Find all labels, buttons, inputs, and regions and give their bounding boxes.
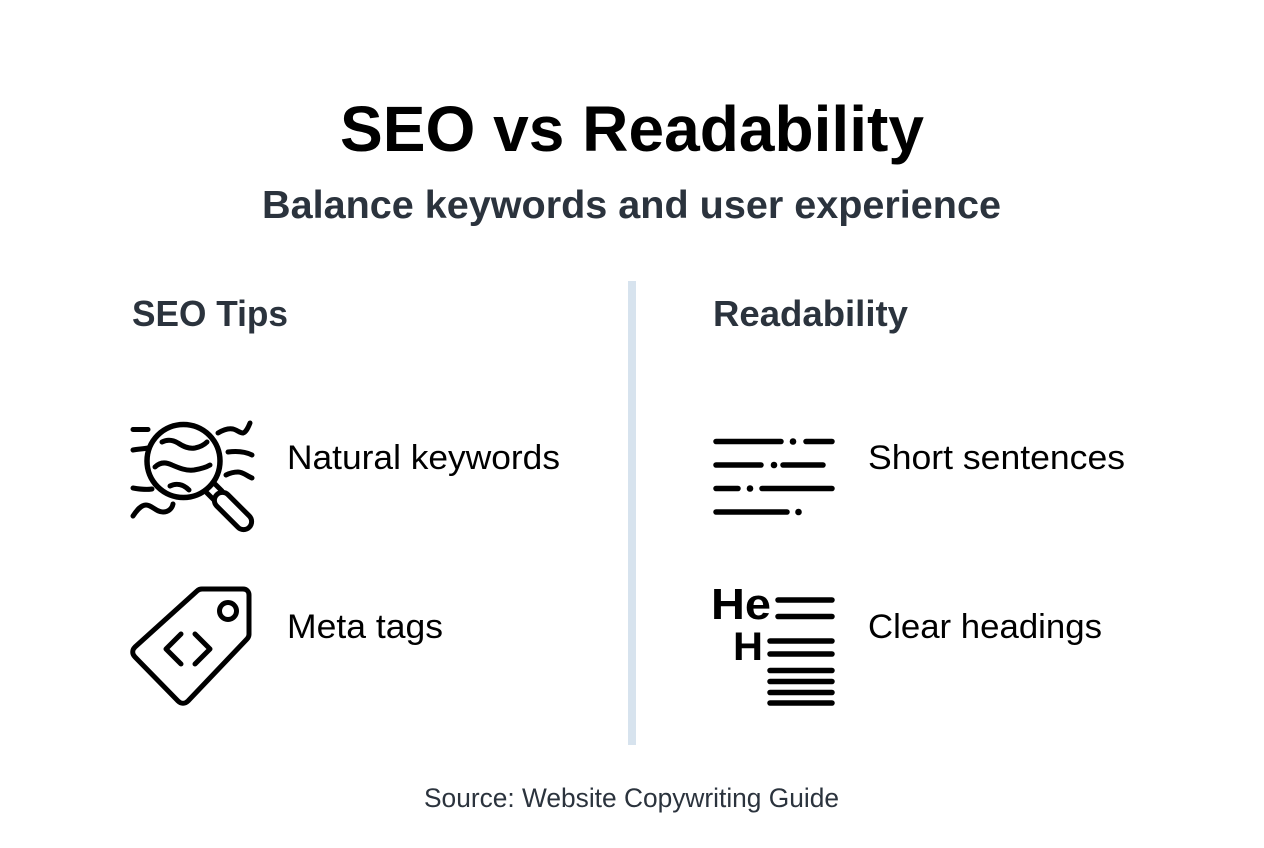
- label: Clear headings: Clear headings: [868, 608, 1102, 646]
- icon: headings with text lines: [711, 580, 832, 703]
- icon: short text lines: [716, 438, 832, 515]
- heading: SEO Tips: SEO Tips: [132, 293, 288, 334]
- panel: SEO tips: [132, 293, 560, 703]
- source note: Source: Website Copywriting Guide: [424, 783, 839, 813]
- label: Short sentences: Short sentences: [868, 439, 1125, 477]
- label: Natural keywords: Natural keywords: [287, 439, 560, 477]
- panel: Readability: [711, 293, 1125, 703]
- label: Meta tags: Meta tags: [287, 608, 443, 646]
- icon: magnifying glass over wavy text: [133, 423, 255, 533]
- icon: headings with text lines: He: [711, 580, 771, 629]
- icon: price tag with code brackets: [133, 589, 249, 703]
- icon: headings with text lines: H: [733, 625, 763, 669]
- center divider: [628, 281, 636, 745]
- subtitle: Balance keywords and user experience: [262, 184, 1001, 227]
- title: SEO vs Readability: [340, 93, 924, 165]
- heading: Readability: Readability: [713, 293, 908, 334]
